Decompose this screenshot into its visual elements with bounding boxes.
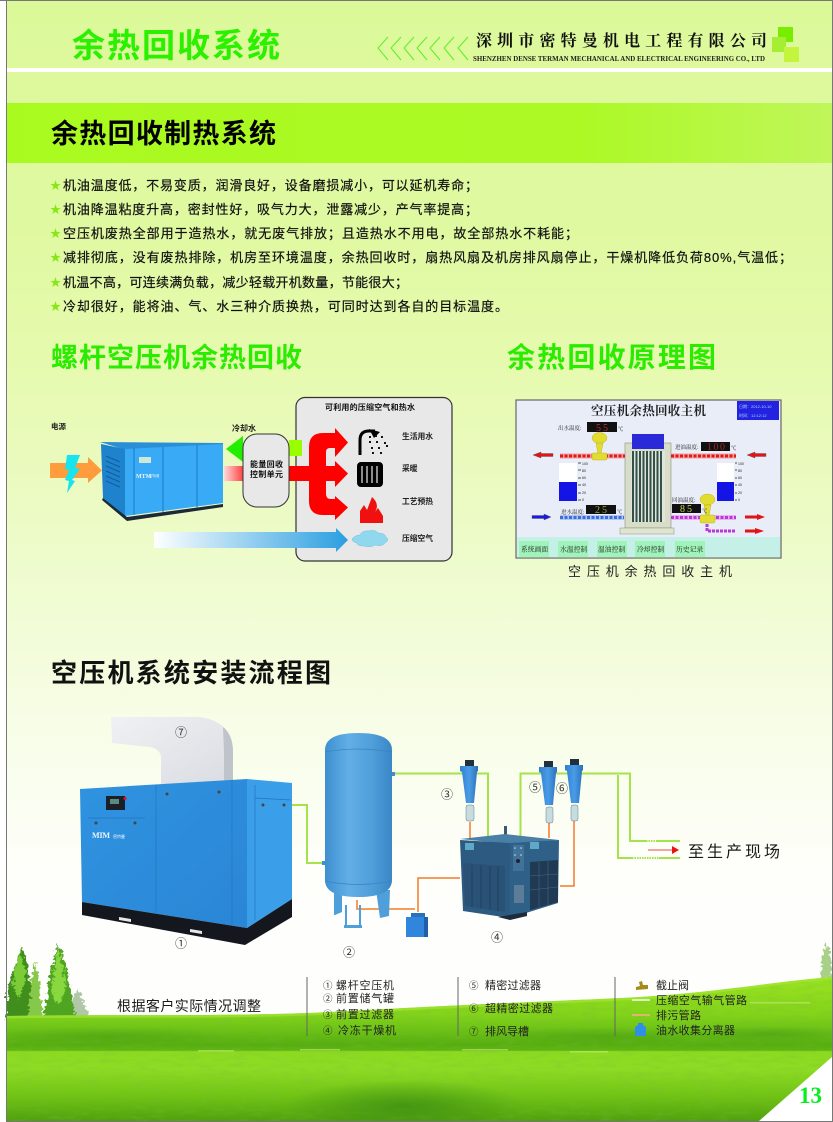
header [72,27,799,64]
level gauges: 100 [582,462,588,466]
readouts: ℃ [702,508,708,515]
bullet list: ★ [50,301,61,313]
compressor cabinet: 密特曼 [113,833,125,839]
icon: cloud [352,530,388,547]
level gauges: 80 [582,469,586,473]
bullet list: ★ [50,252,61,264]
refrigerated dryer [460,826,559,920]
screen buttons: 温油控制 [598,544,625,554]
legend column 1: 冷冻干燥机 [338,1023,396,1037]
legend column 2: ⑦ [469,1027,479,1038]
readouts: 100 [707,442,725,453]
pipe: heat out fade [224,466,244,481]
legend column 2 [469,978,553,1038]
legend column 2: 超精密过滤器 [485,1001,553,1015]
level gauges: 40 [582,483,586,487]
readouts: 出水温度: [558,424,582,432]
label: heating: 采暖 [402,463,418,473]
bullet list: ★ [50,277,61,289]
readouts: 85 [680,504,692,515]
readouts [558,422,737,516]
icon: shower [360,429,388,455]
label: to production site: 至生产现场 [688,843,780,861]
arrow: power input [50,457,102,483]
legend column 3: 压缩空气输气管路 [656,993,747,1007]
legend column 1: ② [323,994,333,1005]
readouts: 进油温度: [675,443,699,451]
legend column 3: 截止阀 [656,978,689,992]
legend column 1: 螺杆空压机 [336,978,394,992]
screen title: 空压机余热回收主机 [591,403,706,418]
note: 根据客户实际情况调整 [117,998,261,1014]
legend column 2: 排风导槽 [485,1024,529,1038]
readouts: ℃ [618,426,624,433]
company english name: SHENZHEN DENSE TERMAN MECHANICAL AND ELECTRICAL ENGINEERING CO., LTD [473,54,766,63]
bullet list: 机油降温粘度升高，密封性好，吸气力大，泄露减少，产气率提高； [63,202,478,218]
drain pipes [357,820,574,912]
screen buttons: 冷却控制 [637,544,664,554]
readouts: 55 [596,423,608,434]
compressor unit [100,442,223,521]
heading: installation flow: 空压机系统安装流程图 [51,658,331,688]
control unit: 能量回收 [250,459,283,469]
number labels: ② [343,946,355,960]
level gauges: 60 [582,476,586,480]
legend column 1: 前置储气罐 [336,991,394,1005]
compressor unit: MTM [136,474,152,480]
section band [6,103,832,163]
label: process preheat: 工艺预热 [402,496,433,506]
level gauges: 20 [738,491,742,495]
control screen [516,400,781,558]
legend column 3: 排污管路 [656,1008,701,1022]
number labels: ⑦ [175,726,187,740]
heading: screw compressor heat recovery: 螺杆空压机余热回收 [51,343,302,373]
readouts: 25 [595,505,607,516]
trees [7,940,833,1019]
level gauges: 0 [582,498,584,502]
bullet list: 机温不高，可连续满负载，减少轻载开机数量，节能很大； [63,275,408,291]
date time box: 日期：2012-10-10 [739,403,772,409]
screen caption: 空压机余热回收主机 [568,564,732,579]
outlet dashes [632,841,659,858]
compressor unit: 密特曼 [149,473,160,478]
page number corner [759,1057,833,1122]
icon: lightning [65,455,80,493]
number labels: ⑤ [529,780,541,794]
screen buttons [517,537,780,558]
number labels: ① [175,936,187,950]
control unit: 控制单元 [250,469,283,479]
number labels: ③ [441,788,453,802]
label: compressed air: 压缩空气 [402,533,433,543]
bullet list: 机油温度低，不易变质，润滑良好，设备磨损减小，可以延机寿命； [63,178,478,194]
panel title: 可利用的压缩空气和热水 [325,402,415,412]
bullet list: ★ [50,204,61,216]
screen buttons: 系统画面 [521,544,548,554]
legend column 2: 精密过滤器 [485,978,541,992]
legend column 1: ① [323,981,333,992]
section heading: 余热回收制热系统 [51,119,276,149]
level gauges [559,462,744,502]
flow arrows [532,452,766,534]
level gauges: 40 [738,483,742,487]
receiver tank [322,733,395,928]
bullet list: ★ [50,228,61,240]
legend [307,977,747,1038]
date time box [737,401,779,420]
icon: flame [360,497,383,523]
compressor cabinet [80,779,292,945]
grass field [0,977,833,1122]
number labels [175,726,568,960]
arrow: red heat distribution [289,428,348,520]
number labels: ⑥ [556,782,568,796]
exhaust duct [111,717,233,785]
legend column 2: ⑥ [469,1004,479,1015]
main title: 余热回收系统 [72,27,280,64]
filters [460,759,583,823]
screen buttons: 历史记录 [676,544,703,554]
pipes [560,456,736,531]
label: domestic water: 生活用水 [402,431,433,441]
heading: recovery schematic: 余热回收原理图 [507,342,716,373]
bullet list: 减排彻底，没有废热排除，机房至环境温度，余热回收时，扇热风扇及机房排风扇停止，干燥机降低负荷80%,气温低； [63,250,792,266]
icon: radiator [357,462,383,487]
logo squares [772,27,799,62]
oil water separator [406,913,428,937]
readouts: 回油温度: [672,496,696,504]
legend column 3 [632,978,747,1037]
control unit [243,434,289,507]
bullet list: ★ [50,180,61,192]
bullet list [50,178,792,314]
legend column 1: ③ [323,1010,333,1021]
heat exchanger [620,434,674,534]
panel: usable air and hot water [296,398,452,561]
level gauges: 60 [738,476,742,480]
level gauges: 20 [582,491,586,495]
bullet list: 冷却很好，能将油、气、水三种介质换热，可同时达到各自的目标温度。 [63,299,508,314]
legend column 2: ⑤ [469,981,479,992]
level gauges: 80 [738,469,742,473]
readouts: ℃ [731,445,737,452]
legend column 3: 油水收集分离器 [656,1023,735,1037]
arrow: cooling water [226,436,243,462]
valves [592,432,715,523]
heat recovery diagram [50,398,452,561]
bullet list: 空压机废热全部用于造热水，就无废气排放；且造热水不用电，故全部热水不耗能； [63,226,578,242]
legend column 1: ④ [323,1026,333,1037]
legend column 1 [323,978,396,1037]
arrow: to production site [648,846,679,854]
readouts: 进水温度: [561,508,585,516]
screen buttons: 水温控制 [560,544,587,554]
installation flow chart [80,717,780,960]
level gauges: 100 [738,462,744,466]
compressor cabinet: MTM [92,831,110,840]
date time box: 时间：12:12:12 [739,412,767,418]
green connector [289,440,302,456]
number labels: ④ [491,930,503,944]
readouts: ℃ [617,509,623,516]
arrow: compressed air [154,528,348,552]
label: power: 电源 [51,421,66,431]
company name: 深圳市密特曼机电工程有限公司 [476,31,767,50]
label: cooling water: 冷却水 [232,423,256,433]
level gauges: 0 [738,498,740,502]
legend column 1: 前置过滤器 [336,1007,394,1021]
air pipes [292,774,680,863]
chevron decoration [378,37,468,60]
page number: 13 [799,1083,822,1108]
